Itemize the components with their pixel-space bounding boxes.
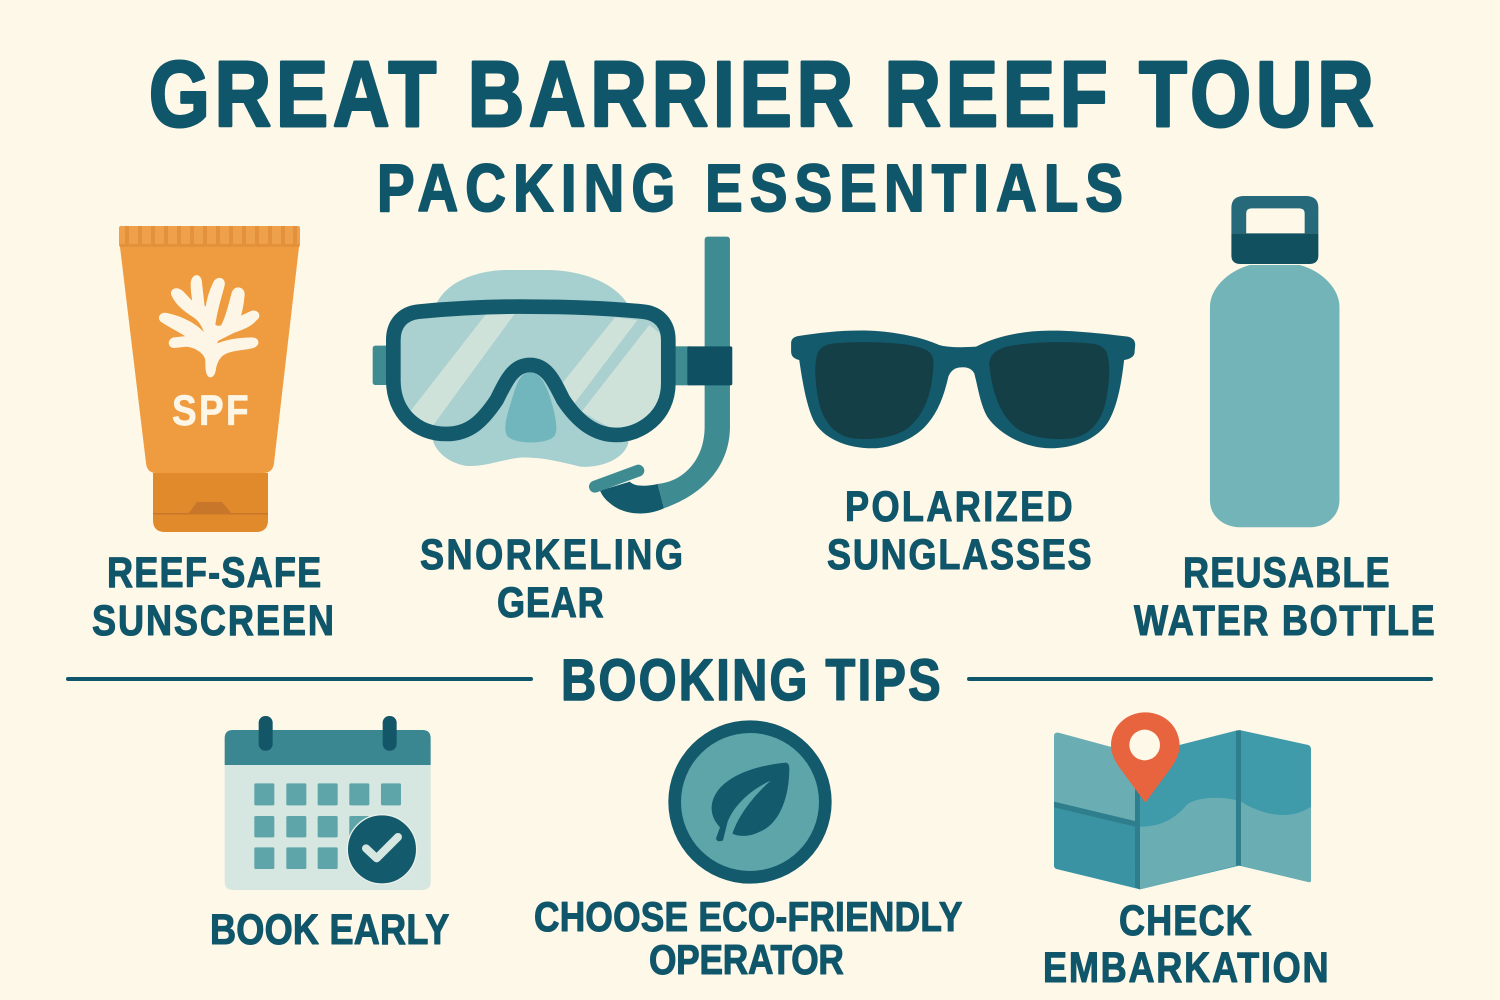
icon: location pin: [1111, 712, 1180, 803]
icon: sunscreen tube: [119, 226, 300, 532]
label: polarized sunglasses: SUNGLASSES: [827, 531, 1092, 579]
icon: eco-friendly leaf badge: [668, 720, 832, 884]
label: snorkeling gear: SNORKELING: [420, 531, 683, 579]
label: reusable water bottle: [1134, 549, 1435, 645]
label: check embarkation: CHECK: [1119, 897, 1252, 945]
section heading: booking tips with dividers: BOOKING TIPS: [561, 649, 941, 713]
label: choose eco-friendly operator: OPERATOR: [649, 937, 844, 984]
icon: polarized sunglasses: [791, 331, 1135, 448]
label: reef-safe sunscreen: REEF-SAFE: [107, 549, 321, 597]
label: reef-safe sunscreen: SUNSCREEN: [92, 597, 334, 645]
label: check embarkation: [1043, 897, 1329, 992]
icon: calendar with check: [225, 716, 431, 890]
icon text: SPF: SPF: [172, 387, 249, 435]
label: book early: BOOK EARLY: [210, 906, 449, 954]
label: polarized sunglasses: [827, 483, 1092, 579]
label: reusable water bottle: WATER BOTTLE: [1134, 597, 1435, 645]
label: snorkeling gear: [420, 531, 683, 627]
subtitle: packing essentials: PACKING ESSENTIALS: [377, 151, 1123, 226]
label: check embarkation: EMBARKATION: [1043, 944, 1329, 992]
label: choose eco-friendly operator: [534, 894, 963, 984]
label: snorkeling gear: GEAR: [497, 579, 604, 627]
icon: snorkeling mask and snorkel: [373, 237, 732, 514]
section heading: booking tips with dividers: [66, 649, 1433, 713]
icon: reusable water bottle: [1210, 196, 1339, 527]
title: GREAT BARRIER REEF TOUR: [149, 43, 1374, 147]
icon: map with location pin: [1054, 712, 1311, 889]
label: reef-safe sunscreen: [92, 549, 334, 645]
label: reusable water bottle: REUSABLE: [1183, 549, 1390, 597]
label: polarized sunglasses: POLARIZED: [845, 483, 1073, 531]
label: choose eco-friendly operator: CHOOSE ECO-FRIENDLY: [534, 894, 963, 941]
